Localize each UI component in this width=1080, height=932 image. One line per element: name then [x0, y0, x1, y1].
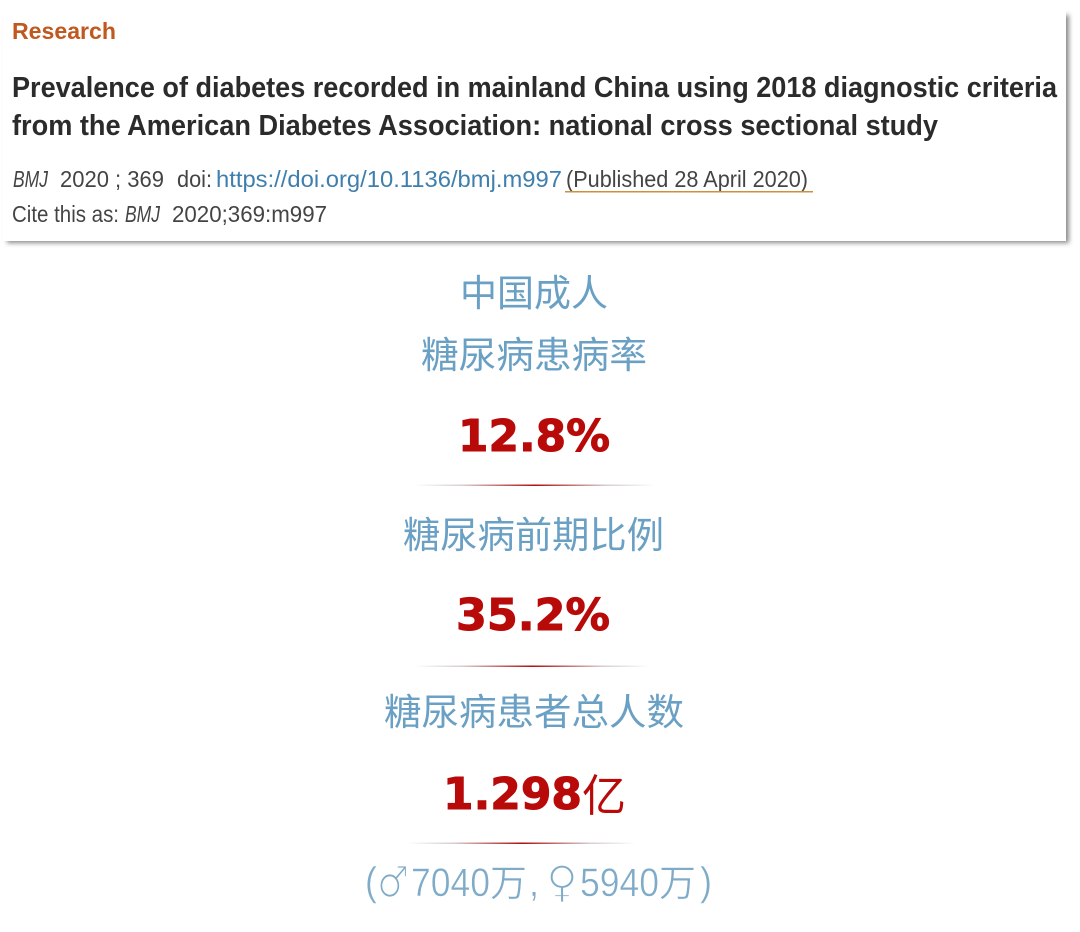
note: male and female counts: , [529, 861, 539, 905]
note: male and female counts: ♀ [546, 857, 578, 908]
publication details: 2020 ; 369 [60, 166, 164, 192]
note: male and female counts: 万 [490, 863, 527, 904]
publication details: doi: [177, 166, 212, 192]
article title: from the American Diabetes Association: national cross sectional study [12, 110, 938, 142]
section label: Research: Research [12, 18, 116, 44]
heading: adult diabetes prevalence: 中国成人 [460, 273, 608, 314]
heading: adult diabetes prevalence: 糖尿病患病率 [421, 335, 647, 376]
note: male and female counts [365, 857, 712, 908]
note: male and female counts: 7040 [411, 861, 490, 905]
publication details: (Published 28 April 2020) [566, 166, 808, 192]
panel: article citation card [3, 10, 1069, 243]
citation line: 2020;369:m997 [172, 201, 327, 227]
citation line: Cite this as: [12, 201, 119, 227]
stat: total 129.8 million: 亿 [582, 772, 626, 821]
note: male and female counts: 5940 [580, 861, 659, 905]
stat: total 129.8 million: 1.298 [443, 769, 582, 820]
note: male and female counts: 万 [659, 863, 696, 904]
heading: total number of patients: 糖尿病患者总人数 [384, 692, 684, 733]
stat: prediabetes 35.2%: 35.2% [456, 590, 610, 641]
stat: prevalence 12.8%: 12.8% [458, 411, 610, 462]
note: male and female counts: ♂ [377, 857, 409, 908]
publication details: BMJ [13, 166, 48, 192]
note: male and female counts: ) [700, 860, 712, 904]
article title [12, 72, 1058, 142]
heading: prediabetes proportion: 糖尿病前期比例 [403, 515, 664, 556]
heading: adult diabetes prevalence [421, 273, 647, 376]
citation line [12, 201, 327, 227]
publication details: https://doi.org/10.1136/bmj.m997 [216, 166, 562, 192]
publication details [13, 166, 813, 192]
note: male and female counts: ( [365, 860, 378, 904]
citation line: BMJ [125, 201, 160, 227]
